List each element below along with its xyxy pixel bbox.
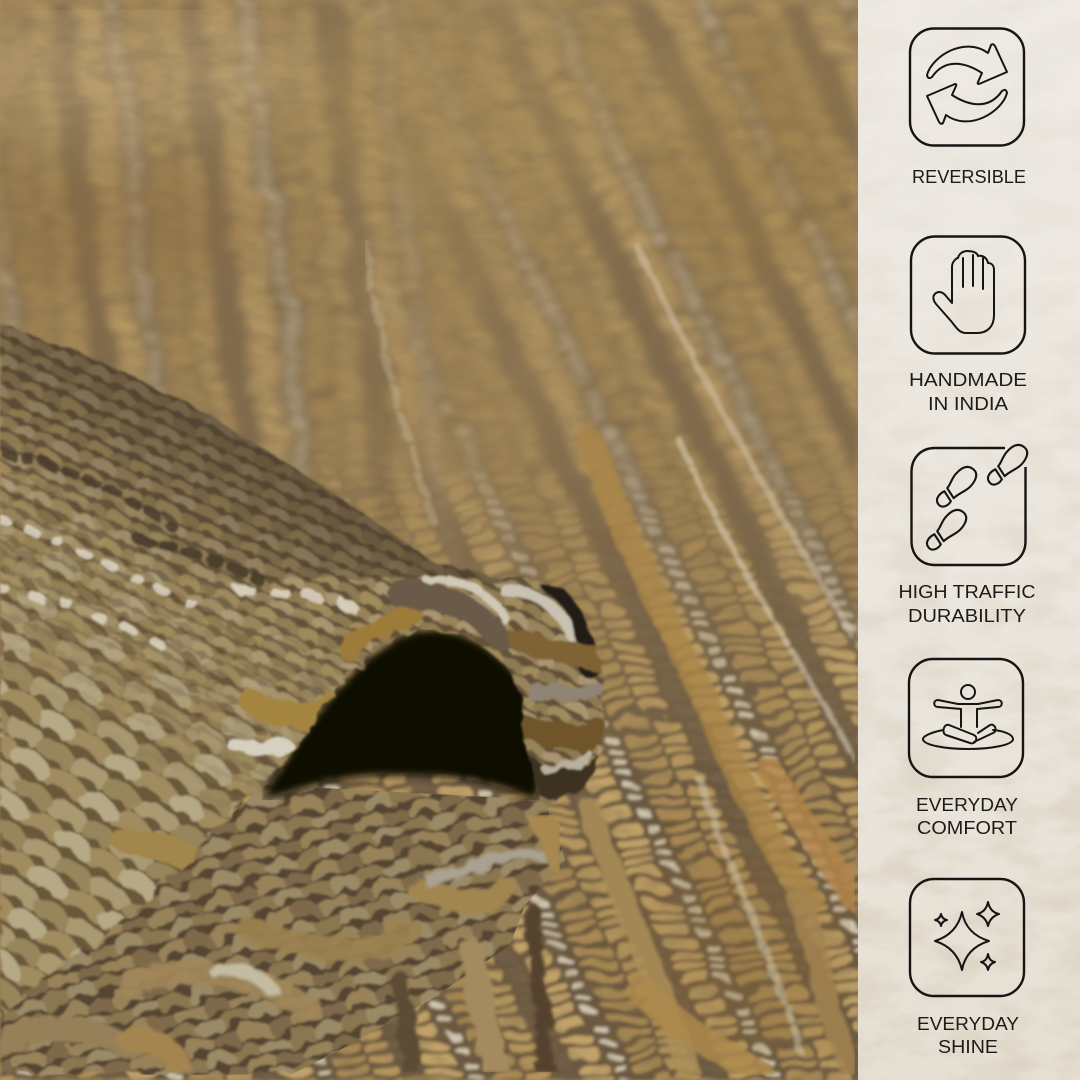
soft colour variation across the rug (0, 10, 850, 1060)
label: handmade in India: HANDMADE (909, 370, 1027, 390)
icon: footprints (923, 441, 1031, 555)
tan veil softening the far rug (0, 0, 860, 760)
icon: seated yoga figure (923, 685, 1013, 749)
label: high traffic durability: DURABILITY (908, 606, 1026, 626)
feature: everyday comfort (909, 659, 1023, 838)
rug stripes: blurred far field right (398, 0, 858, 1080)
feature: everyday shine (910, 879, 1024, 1057)
highlighted strands on the rug (365, 240, 855, 1075)
icon: hand (933, 251, 994, 333)
label: everyday comfort: EVERYDAY (916, 795, 1018, 815)
folded rug flap (0, 320, 620, 1060)
label: reversible: REVERSIBLE (912, 167, 1026, 187)
feature: high traffic durability (898, 441, 1036, 626)
fibre highlights on the flap (0, 450, 600, 855)
label: everyday shine: EVERYDAY (917, 1014, 1019, 1034)
strands on the lower woven layer (0, 815, 560, 1072)
label: everyday shine: SHINE (938, 1037, 998, 1057)
dark hollow inside the fold (262, 630, 540, 800)
rug stripes: blurred far field left (0, 0, 467, 1080)
feature: handmade in India (909, 236, 1027, 414)
panel: features sidebar (858, 0, 1080, 1080)
lower woven layer under the fold (0, 785, 565, 1075)
icon: sparkles (935, 902, 999, 970)
label: handmade in India: IN INDIA (928, 394, 1008, 414)
rug stripes: sharp foreground (0, 482, 858, 1080)
label: high traffic durability: HIGH TRAFFIC (898, 582, 1036, 602)
icon: reversible arrows (927, 44, 1007, 124)
photo: jute rug close-up background (0, 0, 860, 1080)
label: everyday comfort: COMFORT (917, 818, 1017, 838)
feature: reversible (910, 28, 1026, 187)
